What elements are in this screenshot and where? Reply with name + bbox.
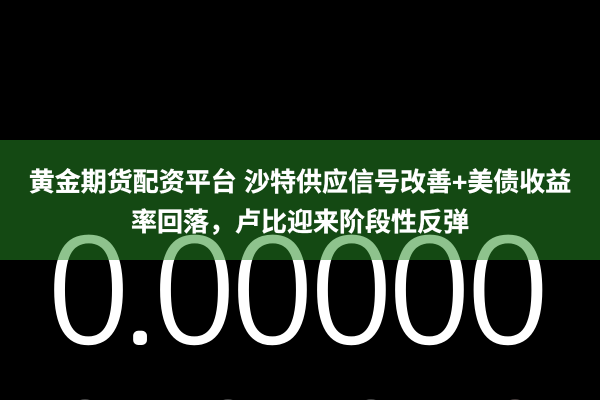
zero digits: 000000 bbox=[47, 200, 549, 379]
title bbox=[29, 167, 571, 237]
next row digit tops bbox=[77, 400, 523, 401]
title: 率回落，卢比迎来阶段性反弹 bbox=[131, 207, 469, 237]
decimal point: . bbox=[134, 305, 146, 349]
green translucent title band bbox=[0, 140, 600, 260]
title: 黄金期货配资平台 沙特供应信号改善+美债收益 bbox=[29, 167, 571, 197]
